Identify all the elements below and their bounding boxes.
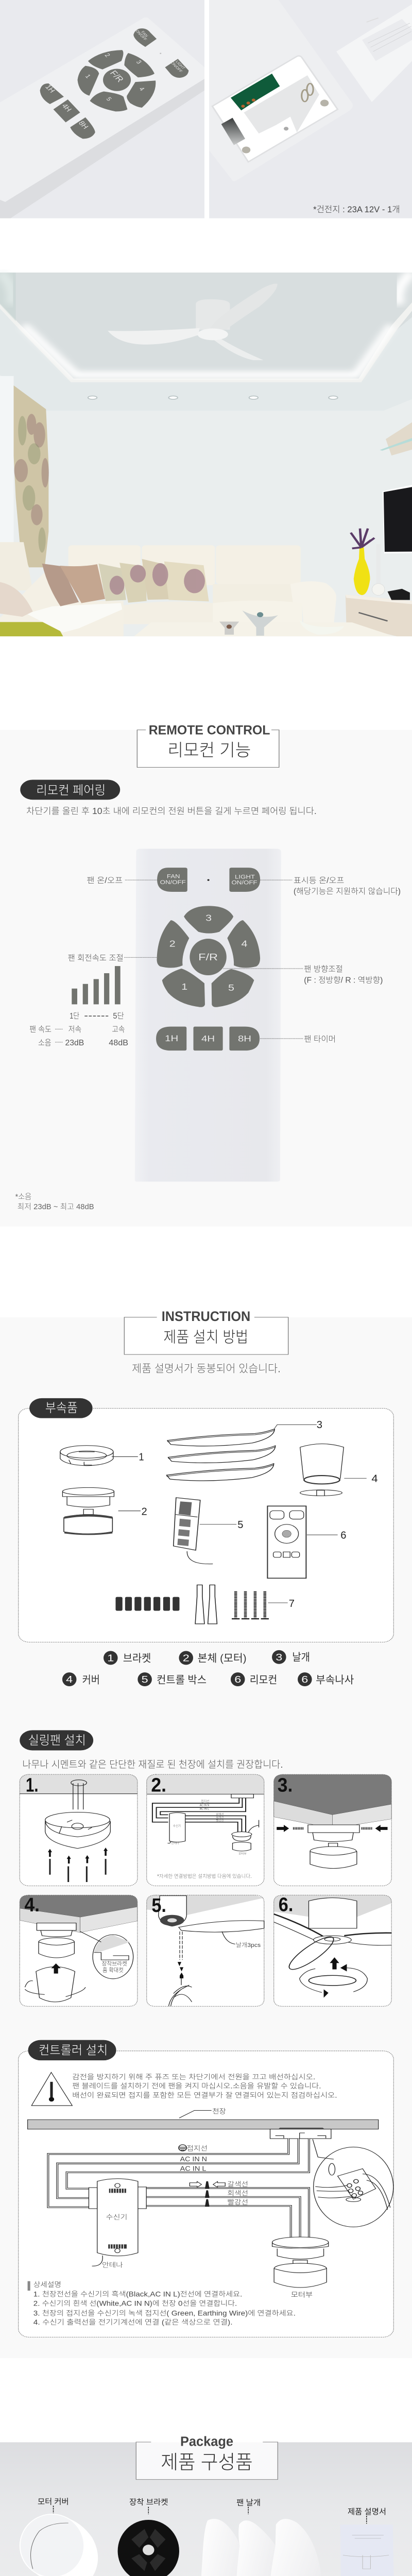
section: remote control functions: [0, 723, 412, 1226]
ceiling: [0, 273, 412, 413]
wire labels: AC IN N: [180, 2156, 207, 2163]
panel: controller installation: [19, 2040, 393, 2337]
item: manual: [340, 2507, 394, 2576]
pill: controller: [28, 2040, 116, 2060]
detailed instructions: 3. 천장의 접지선을 수신기의 녹색 접지선( Green, Earthing Wire)에 연결하세요.: [33, 2309, 296, 2317]
section: package contents: [0, 2434, 412, 2576]
heading: remote control: 리모컨 기능: [168, 741, 251, 760]
icon: warning triangle: [31, 2072, 72, 2106]
pill: controller: 컨트롤러 설치: [39, 2044, 108, 2057]
part 5: control box: [174, 1498, 243, 1564]
accessories legend: 리모컨: [250, 1674, 277, 1686]
step 5: [147, 1895, 264, 2006]
cushions: [0, 559, 209, 617]
step 2: 2.: [151, 1775, 166, 1796]
callouts: 팬 온/오프: [87, 876, 123, 885]
panel: accessories: [19, 1398, 393, 1642]
chart: fan speed bars: 5단: [113, 1011, 124, 1021]
heading: package: 제품 구성품: [161, 2452, 253, 2473]
pill: accessories: 부속품: [45, 1401, 78, 1415]
wire labels: 갈색선: [227, 2181, 248, 2189]
remote button labels: [44, 29, 186, 130]
remote button labels: 1: [83, 73, 92, 79]
battery cavity: [212, 56, 338, 162]
part 5: control box: 5: [237, 1519, 243, 1531]
speed and direction buttons: 2: [169, 939, 176, 949]
wire nuts: [205, 2181, 210, 2207]
remote button labels: 4: [138, 86, 146, 92]
step 4: [20, 1895, 138, 2006]
speed and direction buttons: F/R: [198, 952, 218, 962]
accessories legend: 브라켓: [123, 1652, 151, 1664]
step 4: 홈 확대컷: [102, 1967, 124, 1973]
accessories legend: 3: [276, 1652, 282, 1663]
wire labels: 접지선: [186, 2145, 208, 2153]
heading: package: Package: [180, 2434, 233, 2449]
remote button labels: FAN: [140, 30, 149, 38]
instruction description: 제품 설명서가 동봉되어 있습니다.: [132, 1363, 281, 1375]
pill: accessories: [29, 1398, 93, 1418]
panel: ceiling fan installation: [20, 1730, 391, 2006]
part 2: motor: 2: [141, 1505, 147, 1517]
heading: package: [136, 2434, 278, 2480]
chart: fan speed bars: 소음: [38, 1038, 51, 1047]
step 2: 안테나: [171, 1841, 179, 1845]
step 4: 장착브라켓: [101, 1960, 127, 1967]
detailed instructions: 상세설명: [33, 2281, 61, 2289]
right wall with shelf and tv: [380, 422, 412, 553]
step 2: 회색선: [216, 1815, 224, 1819]
step 4: 4.: [24, 1895, 40, 1916]
wire labels: [179, 2145, 248, 2206]
pairing description: 차단기를 올린 후 10초 내에 리모컨의 전원 버튼을 길게 누르면 페어링 됩니다.: [26, 806, 317, 816]
accessories legend: 부속나사: [316, 1674, 354, 1686]
noise note: 최저 23dB ~ 최고 48dB: [18, 1202, 94, 1211]
accessories legend: [62, 1650, 354, 1686]
speed and direction buttons: 4: [242, 939, 248, 949]
panel: remote photo, front: [0, 0, 204, 218]
button: fan on/off: [157, 868, 187, 892]
step 6: 6.: [279, 1894, 293, 1916]
callouts: 팬 타이머: [304, 1035, 336, 1044]
step 2: AC IN N: [200, 1804, 209, 1807]
remote button labels: F/R: [108, 69, 126, 84]
detailed instructions: 1. 천장전선을 수신기의 흑색(Black,AC IN L)전선에 연결하세요.: [33, 2290, 242, 2298]
part 1: bracket: [60, 1446, 144, 1466]
receiver: 수신기: [106, 2213, 127, 2221]
part 4: cover: 4: [371, 1472, 378, 1484]
receiver: [89, 2179, 146, 2268]
coffee table: [134, 611, 394, 636]
chart: fan speed bars: [29, 966, 128, 1047]
remote button labels: 5: [105, 96, 113, 102]
part 3: blades: [166, 1419, 322, 1481]
accessories legend: 컨트롤 박스: [157, 1674, 207, 1686]
wire labels: 회색선: [227, 2190, 248, 2197]
callouts: [68, 876, 401, 1044]
heading: remote control: [137, 723, 279, 767]
step 2: [147, 1774, 264, 1886]
step 2: 접지선: [201, 1799, 210, 1803]
remote button labels: 1H: [44, 83, 57, 94]
install description: 나무나 시멘트와 같은 단단한 재질로 된 천장에 설치를 권장합니다.: [22, 1759, 283, 1770]
timer buttons: 4H: [201, 1034, 215, 1043]
wire labels: AC IN L: [180, 2165, 207, 2173]
button: fan on/off: FAN: [167, 873, 180, 879]
chart: fan speed bars: 1단: [70, 1011, 79, 1021]
remote back body: [209, 0, 353, 181]
detailed instructions: [28, 2281, 296, 2326]
detailed instructions: 4. 수신기 출력선을 전기기계선에 연결 (같은 색상으로 연결).: [33, 2318, 233, 2326]
remote button labels: 2: [103, 52, 112, 59]
chart: fan speed bars: 48dB: [109, 1038, 128, 1047]
battery cover: [336, 4, 412, 102]
part 7: screws: 7: [289, 1598, 295, 1609]
item: mounting bracket: 장착 브라켓: [129, 2498, 168, 2506]
wire detail circle: [313, 2139, 393, 2227]
remote button labels: LIGHT: [175, 60, 186, 70]
step 6: [274, 1894, 391, 2006]
remote button labels: 8H: [77, 120, 90, 130]
callouts: (F : 정방향/ R : 역방향): [304, 975, 383, 985]
motor: 모터부: [291, 2291, 313, 2299]
wiring diagram: [28, 2108, 393, 2299]
noise note: *소음: [15, 1192, 31, 1201]
timer buttons: 8H: [238, 1034, 251, 1043]
ceiling fan: [108, 284, 278, 360]
part 7: screws: [115, 1585, 295, 1624]
part 3: blades: 3: [317, 1419, 322, 1431]
accessories legend: 커버: [82, 1674, 100, 1686]
remote button labels: 4H: [60, 102, 74, 113]
photo: living room with ceiling fan: [0, 273, 412, 636]
part 1: bracket: 1: [139, 1451, 144, 1463]
remote body: [0, 18, 204, 218]
timer buttons: 1H: [165, 1033, 178, 1043]
button: light on/off: LIGHT: [235, 874, 255, 880]
callouts: 팬 회전속도 조절: [68, 953, 124, 962]
item: motor cover: [20, 2497, 98, 2576]
remote button labels: ON/OFF: [170, 61, 184, 74]
part 4: cover: [300, 1444, 378, 1496]
noise note: [15, 1192, 94, 1211]
accessories legend: 날개: [292, 1651, 310, 1663]
remote diagram: [135, 849, 281, 1181]
pill: install: 실링팬 설치: [28, 1734, 86, 1747]
remote button labels: 3: [134, 59, 143, 65]
part 2: motor: [62, 1487, 147, 1535]
speed and direction buttons: 5: [228, 983, 234, 993]
chart: fan speed bars: 고속: [112, 1025, 125, 1033]
step 2: 수신기: [173, 1824, 181, 1828]
accessories legend: 6: [301, 1674, 308, 1685]
chart: fan speed bars: 팬 속도: [29, 1025, 52, 1033]
step 1: [20, 1774, 138, 1886]
callouts: 표시등 온/오프: [294, 876, 344, 885]
pill: remote pairing: [20, 779, 120, 800]
step 3: 3.: [278, 1775, 293, 1796]
chart: fan speed bars: 저속: [68, 1025, 81, 1033]
speed and direction buttons: [157, 906, 260, 1007]
step 1: 1.: [26, 1775, 38, 1796]
step 2: AC IN L: [200, 1807, 209, 1810]
accessories legend: 본체 (모터): [198, 1652, 247, 1664]
part 6: remote: 6: [340, 1529, 346, 1541]
warning text: 감전을 방지하기 위해 주 퓨즈 또는 차단기에서 전원을 끄고 배선하십시오.: [72, 2073, 315, 2081]
step 3: [274, 1774, 391, 1886]
timer buttons: [156, 1027, 260, 1050]
receiver: 안테나: [102, 2261, 123, 2268]
step 5: 날개3pcs: [236, 1941, 261, 1948]
item: fan blades: 팬 날개: [236, 2498, 261, 2507]
detailed instructions: 2. 수신기의 흰색 선(White,AC IN N)에 천장 0선을 연결합니다.: [33, 2299, 237, 2308]
step 2: 빨강선: [216, 1818, 224, 1822]
heading: remote control: REMOTE CONTROL: [149, 723, 270, 737]
wiring diagram: 천장: [212, 2108, 226, 2115]
chart: fan speed bars: 23dB: [65, 1038, 84, 1047]
item: motor cover: 모터 커버: [38, 2497, 69, 2506]
warning text: [72, 2073, 337, 2099]
remote buttons: [40, 28, 188, 139]
accessories legend: 2: [183, 1653, 190, 1664]
heading: instruction: [124, 1309, 288, 1354]
curtain: [0, 376, 49, 567]
button: light on/off: [229, 868, 260, 892]
sideboard, vase and speaker: [346, 529, 412, 636]
item: fan blades: [200, 2498, 324, 2576]
step 2: 갈색선: [216, 1812, 224, 1816]
pill: remote pairing: 리모컨 페어링: [36, 784, 106, 797]
sofa: [0, 542, 336, 636]
part 6: remote: [267, 1506, 346, 1578]
accessories legend: 1: [107, 1653, 114, 1664]
heading: instruction: INSTRUCTION: [162, 1309, 250, 1324]
step 2: *자세한 연결방법은 설치방법 다음에 있습니다.: [157, 1873, 252, 1879]
heading: instruction: 제품 설치 방법: [163, 1329, 248, 1346]
warning text: 배선이 완료되면 접지를 포함한 모든 연결부가 잘 연결되어 있는지 점검하십시오.: [72, 2091, 337, 2099]
section: instruction: [0, 1309, 412, 2358]
step 2: 모터부: [238, 1852, 247, 1856]
downlights: [88, 396, 338, 399]
step 5: 5.: [151, 1895, 166, 1917]
accessories legend: 6: [234, 1674, 241, 1685]
accessories legend: 4: [66, 1674, 73, 1685]
accessories legend: 5: [142, 1674, 148, 1685]
remote button labels: ON/OFF: [134, 29, 148, 42]
item: manual: 제품 설명서: [348, 2507, 386, 2516]
item: mounting bracket: [118, 2498, 179, 2576]
pill: install: [20, 1730, 93, 1751]
button: fan on/off: ON/OFF: [160, 879, 186, 886]
wire labels: 빨강선: [227, 2198, 248, 2206]
speed and direction buttons: 1: [181, 982, 187, 992]
panel: remote photo, back with battery: [209, 0, 412, 218]
callouts: 팬 방향조절: [304, 964, 343, 974]
motor: [272, 2237, 329, 2299]
warning text: 팬 블레이드를 설치하기 전에 팬을 켜지 마십시오.소음을 유발할 수 있습니다.: [72, 2082, 321, 2090]
speed and direction buttons: 3: [205, 913, 212, 923]
button: light on/off: ON/OFF: [231, 879, 258, 886]
